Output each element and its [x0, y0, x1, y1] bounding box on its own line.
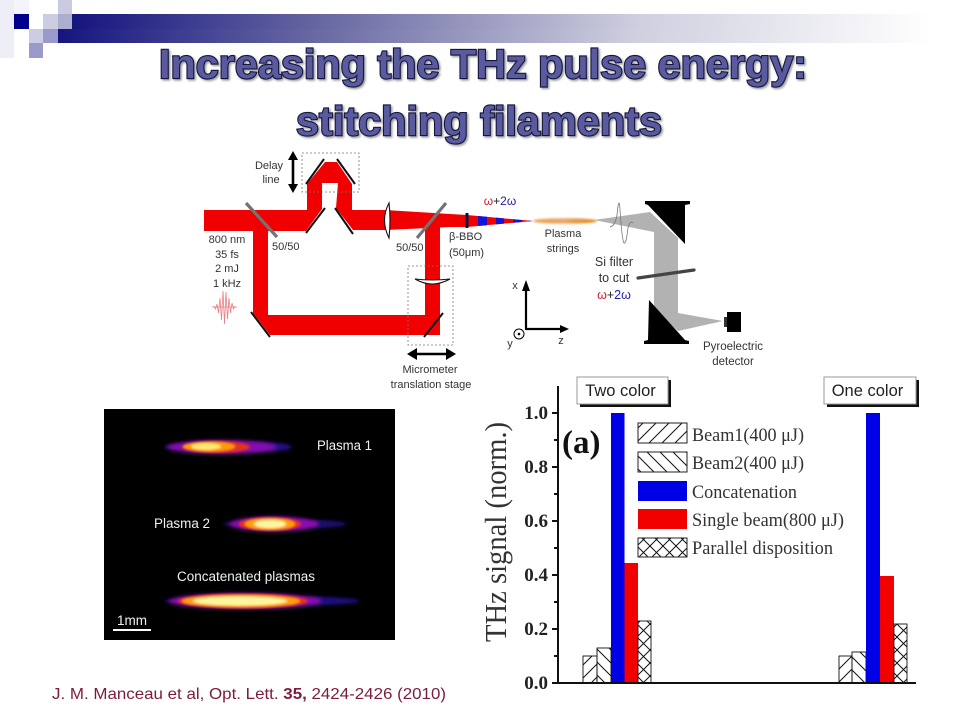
- legend: [638, 423, 844, 559]
- y tick labels: 1.0: [524, 403, 548, 424]
- beam splitters: [246, 203, 446, 238]
- setup labels: 50/50: [396, 242, 424, 254]
- setup labels: 800 nm: [209, 234, 245, 246]
- plasma labels: [117, 438, 372, 628]
- y tick labels: 0.6: [524, 511, 548, 532]
- setup labels: 50/50: [272, 241, 300, 253]
- setup labels: ω+2ω: [597, 288, 631, 302]
- plasma 1: [164, 440, 292, 454]
- plasma labels: Concatenated plasmas: [177, 569, 315, 584]
- plasma labels: 1mm: [117, 613, 147, 628]
- delay arrow: [292, 156, 294, 188]
- setup labels: strings: [547, 243, 580, 255]
- two color tag: [577, 377, 671, 407]
- bars two color: [583, 413, 651, 683]
- micrometer stage dashed box: [408, 266, 453, 345]
- coordinate axes: x: [512, 280, 518, 292]
- laser beam path: [204, 162, 450, 335]
- title: Increasing the THz pulse energy:: [159, 41, 807, 87]
- header decoration: squares and gradient band: [0, 0, 932, 58]
- setup labels: Pyroelectric: [703, 341, 763, 353]
- parabolic mirrors: [644, 201, 690, 344]
- coordinate axes: y: [507, 338, 513, 350]
- citation: J. M. Manceau et al, Opt. Lett. 35, 2424-2426 (2010): [52, 686, 446, 703]
- legend: Single beam(800 μJ): [692, 510, 844, 531]
- THz beam: [594, 212, 723, 331]
- y tick labels: 0.2: [524, 619, 548, 640]
- one color tag: [824, 377, 919, 407]
- plasma image panel: [104, 409, 395, 640]
- setup labels: line: [262, 174, 280, 186]
- y tick labels: 0.8: [524, 457, 548, 478]
- setup labels: ω+2ω: [484, 194, 516, 208]
- delay line dashed box: [302, 153, 359, 192]
- concatenated plasma: [164, 593, 360, 609]
- setup labels: [209, 160, 763, 391]
- plasma strings: [533, 218, 597, 224]
- THz waveform: [610, 203, 633, 243]
- setup labels: to cut: [599, 271, 630, 285]
- translation arrow: [412, 353, 451, 355]
- Si filter: [638, 270, 694, 278]
- two color tag: Two color: [585, 382, 656, 400]
- title: stitching filaments: [296, 98, 662, 144]
- coordinate axes: z: [558, 335, 564, 347]
- plasma labels: Plasma 2: [154, 516, 210, 531]
- legend: Parallel disposition: [692, 538, 833, 559]
- y axis title: THz signal (norm.): [478, 422, 513, 642]
- lenses: [384, 203, 450, 284]
- plasma labels: Plasma 1: [317, 438, 372, 453]
- setup labels: (50μm): [449, 247, 484, 259]
- y tick labels: 0.4: [524, 565, 548, 586]
- setup labels: 1 kHz: [213, 278, 241, 290]
- title: [159, 41, 807, 144]
- setup labels: detector: [712, 356, 754, 368]
- legend: Concatenation: [692, 482, 797, 503]
- coordinate axes: [507, 280, 569, 350]
- bar chart: [478, 377, 919, 694]
- laser pulse icon: [212, 291, 237, 324]
- pyroelectric detector: [724, 312, 741, 332]
- plasma 2: [223, 516, 347, 532]
- axes and ticks: [552, 386, 916, 684]
- bars one color: [839, 413, 907, 683]
- setup labels: Delay: [255, 160, 284, 172]
- setup labels: Micrometer: [402, 364, 458, 376]
- y tick labels: [524, 403, 548, 694]
- scale bar: [113, 629, 151, 631]
- optical setup diagram: [204, 151, 763, 391]
- setup labels: translation stage: [391, 379, 471, 391]
- y tick labels: 0.0: [524, 673, 548, 694]
- setup labels: Si filter: [595, 255, 633, 269]
- BBO crystal and two-colour beam: [450, 213, 533, 228]
- one color tag: One color: [832, 382, 904, 400]
- setup labels: Plasma: [545, 228, 582, 240]
- panel letter: (a): [562, 425, 600, 461]
- setup labels: 35 fs: [215, 249, 239, 261]
- legend: Beam1(400 μJ): [692, 425, 804, 446]
- mirrors: [251, 159, 443, 337]
- legend: Beam2(400 μJ): [692, 453, 804, 474]
- setup labels: 2 mJ: [215, 263, 239, 275]
- setup labels: β-BBO: [449, 231, 483, 243]
